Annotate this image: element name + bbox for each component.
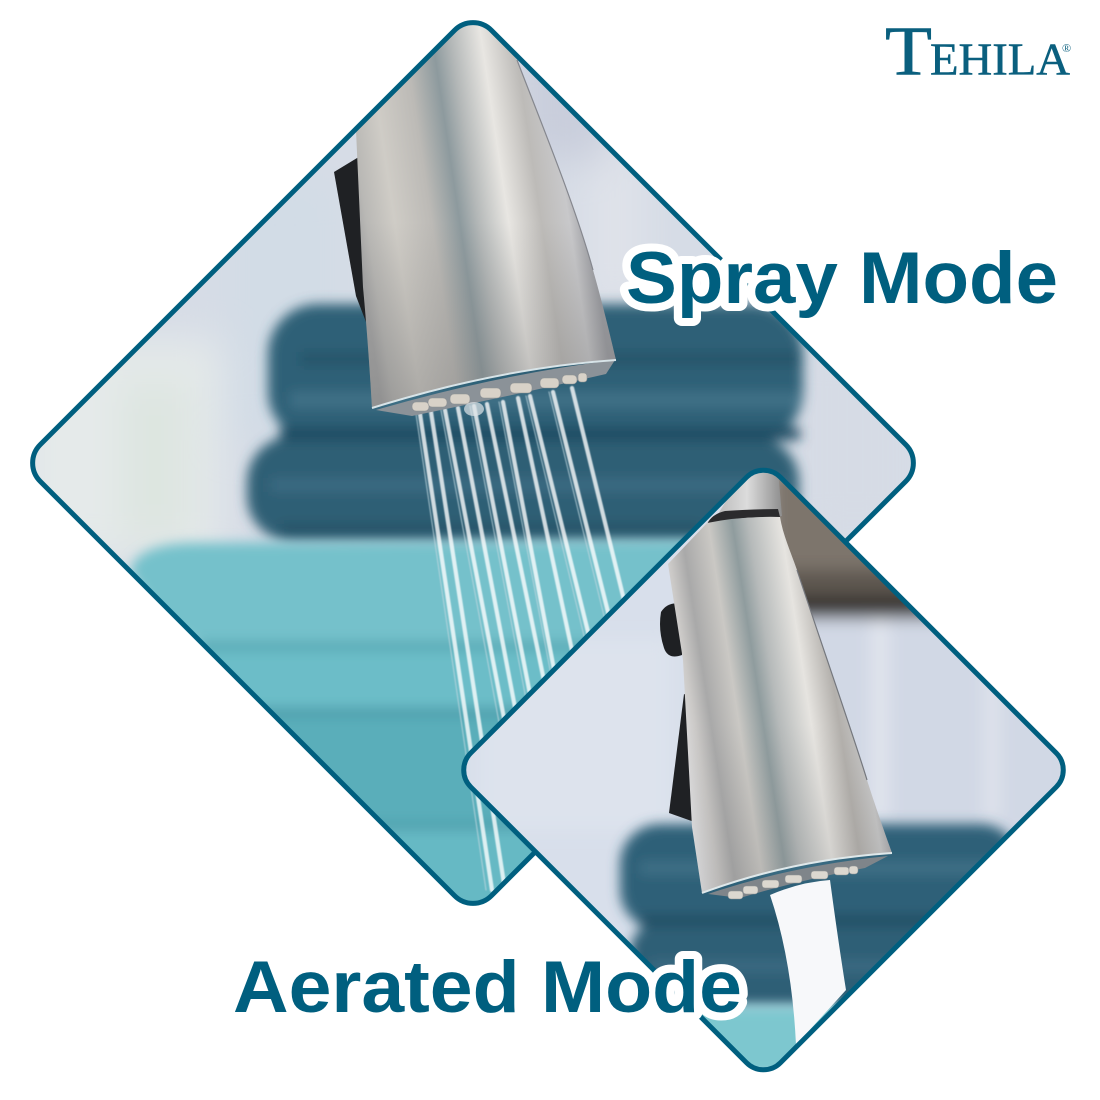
water drop — [464, 402, 484, 416]
photo: aerated mode scene — [466, 472, 1061, 1068]
faucet neck — [718, 472, 782, 516]
trigger — [669, 694, 692, 822]
photo: spray mode scene — [35, 25, 911, 901]
dark towels — [620, 824, 1020, 1006]
faucet trigger — [334, 155, 366, 322]
nozzle face — [708, 856, 888, 898]
diamond border — [454, 460, 1073, 1080]
aerator nozzles — [728, 866, 858, 899]
panel: spray mode diamond photo — [30, 20, 916, 906]
diamond border — [22, 12, 924, 914]
logo: Tehila: ® — [1062, 41, 1071, 55]
water streams — [416, 388, 624, 890]
dark towel stack — [247, 304, 803, 542]
heading: Spray Mode: Spray Mode — [626, 238, 1058, 319]
light teal towel — [702, 998, 841, 1068]
aerated water stream — [770, 880, 846, 1045]
light teal towel stack — [130, 540, 700, 918]
heading: Aerated Mode: Aerated Mode — [233, 947, 742, 1028]
logo: Tehila: T — [885, 14, 932, 90]
knob button — [660, 603, 682, 656]
spray head — [356, 0, 616, 416]
spray head body — [668, 517, 892, 893]
logo: Tehila: EHILA — [930, 34, 1070, 84]
spray nozzles — [412, 373, 587, 411]
black ring — [707, 509, 780, 524]
panel: aerated mode diamond photo — [461, 468, 1066, 1072]
logo: Tehila — [885, 14, 1071, 90]
